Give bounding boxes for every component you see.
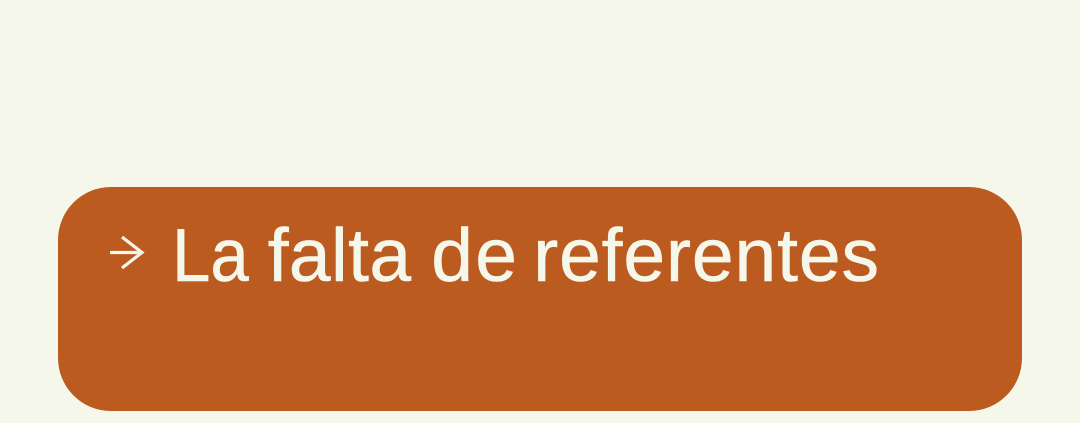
heading: referentes — [533, 213, 880, 297]
panel: orange card — [58, 187, 1022, 411]
heading: de — [431, 213, 519, 297]
icon: arrow — [110, 236, 144, 270]
heading: La — [172, 213, 248, 297]
heading: falta — [268, 213, 411, 297]
heading — [172, 213, 880, 297]
